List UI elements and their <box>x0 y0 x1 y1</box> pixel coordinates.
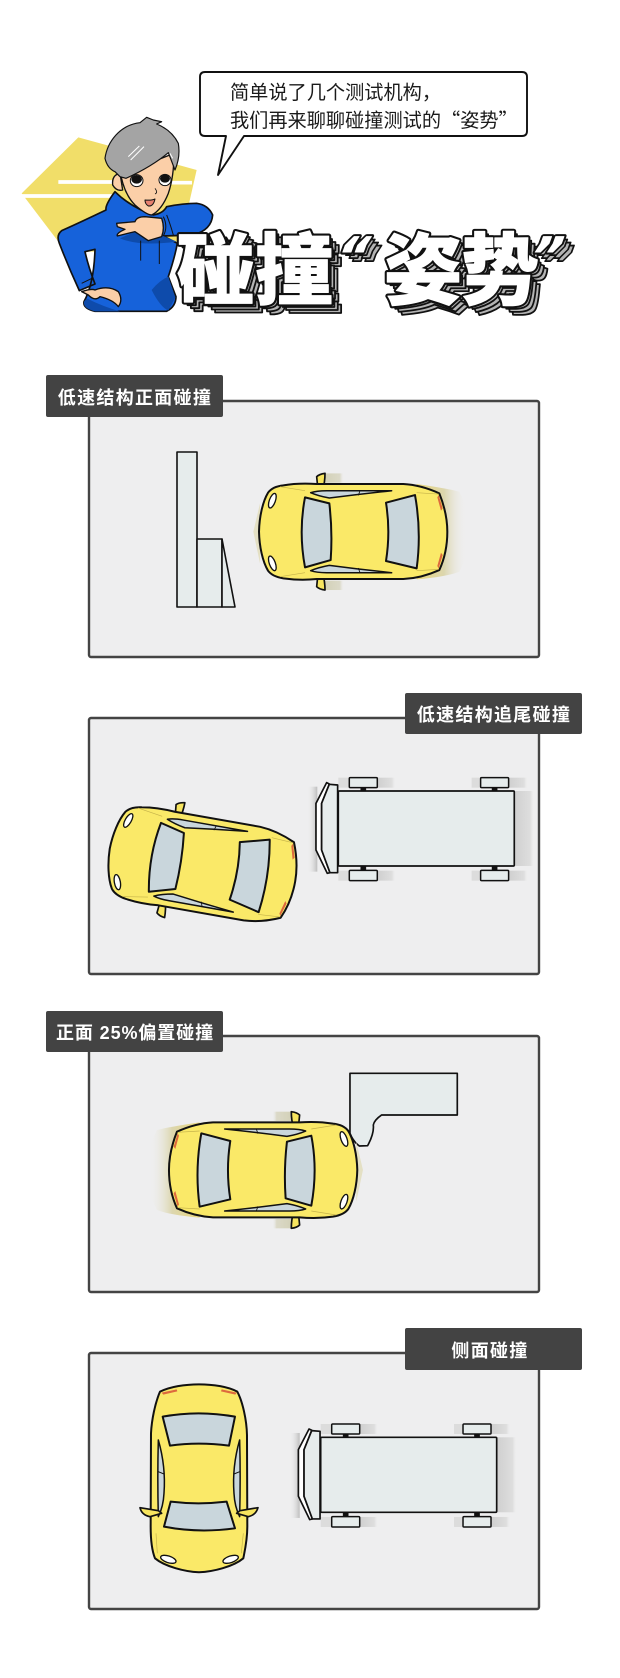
head <box>105 117 179 215</box>
title: 碰撞“姿势”: 姿势 <box>394 218 549 330</box>
panel: side crash <box>89 1328 582 1609</box>
title: 碰撞“姿势”: “ <box>325 227 379 286</box>
label <box>46 1011 223 1052</box>
grey hair <box>105 117 179 178</box>
bubble text: 我们再来聊聊碰撞测试的“姿势” <box>230 105 518 133</box>
title: 碰撞“姿势”: “ <box>325 227 379 286</box>
truck barrier <box>307 778 534 881</box>
title: 碰撞“姿势”: 碰撞 <box>177 209 333 321</box>
label: 低速结构追尾碰撞 <box>417 704 571 725</box>
yellow car, facing right <box>150 1112 363 1228</box>
front hand <box>117 217 163 241</box>
panel: low-speed frontal crash <box>46 375 539 657</box>
title: 碰撞“姿势”: 碰撞 <box>177 209 333 321</box>
label <box>405 1328 582 1370</box>
title: 碰撞“姿势”: 碰撞 <box>180 212 336 324</box>
bubble text: 简单说了几个测试机构， <box>230 77 441 105</box>
label: 侧面碰撞 <box>451 1341 529 1361</box>
label <box>405 693 582 734</box>
blue hoodie <box>58 192 213 311</box>
yellow car <box>253 473 467 590</box>
title: 碰撞“姿势”: 碰撞 <box>184 215 340 327</box>
title: 碰撞“姿势”: ” <box>528 236 582 295</box>
label: 低速结构正面碰撞 <box>58 388 212 408</box>
panel: 25% offset crash <box>46 1011 539 1292</box>
title: 碰撞“姿势”: 姿势 <box>387 212 542 324</box>
eyes <box>130 174 171 187</box>
panel: low-speed rear-end crash <box>89 693 582 974</box>
yellow hexagon backdrop <box>22 137 197 252</box>
yellow car, facing down <box>140 1384 258 1572</box>
label <box>46 375 223 417</box>
offset barrier <box>350 1073 457 1146</box>
yellow car, angled <box>100 791 305 939</box>
title: 碰撞“姿势”: “ <box>332 233 386 292</box>
title: 碰撞“姿势”: 碰撞 <box>187 218 343 330</box>
title: 碰撞“姿势”: “ <box>329 230 383 289</box>
title: 碰撞“姿势”: ” <box>525 233 579 292</box>
title: 碰撞“姿势”: 姿势 <box>384 209 539 321</box>
barrier <box>177 452 235 607</box>
label: 正面 25%偏置碰撞 <box>56 1023 214 1043</box>
character illustration <box>22 117 213 311</box>
truck barrier <box>290 1424 517 1527</box>
waist hand <box>82 288 121 307</box>
title: 碰撞“姿势”: ” <box>522 230 576 289</box>
title: 碰撞“姿势”: ” <box>518 227 572 286</box>
title: 碰撞“姿势”: 姿势 <box>384 209 539 321</box>
title: 碰撞“姿势”: ” <box>518 227 572 286</box>
title: 碰撞“姿势” <box>177 209 582 330</box>
title: 碰撞“姿势”: “ <box>335 236 389 295</box>
title: 碰撞“姿势”: 姿势 <box>391 215 546 327</box>
mouth <box>145 199 155 206</box>
speech bubble <box>200 72 527 175</box>
